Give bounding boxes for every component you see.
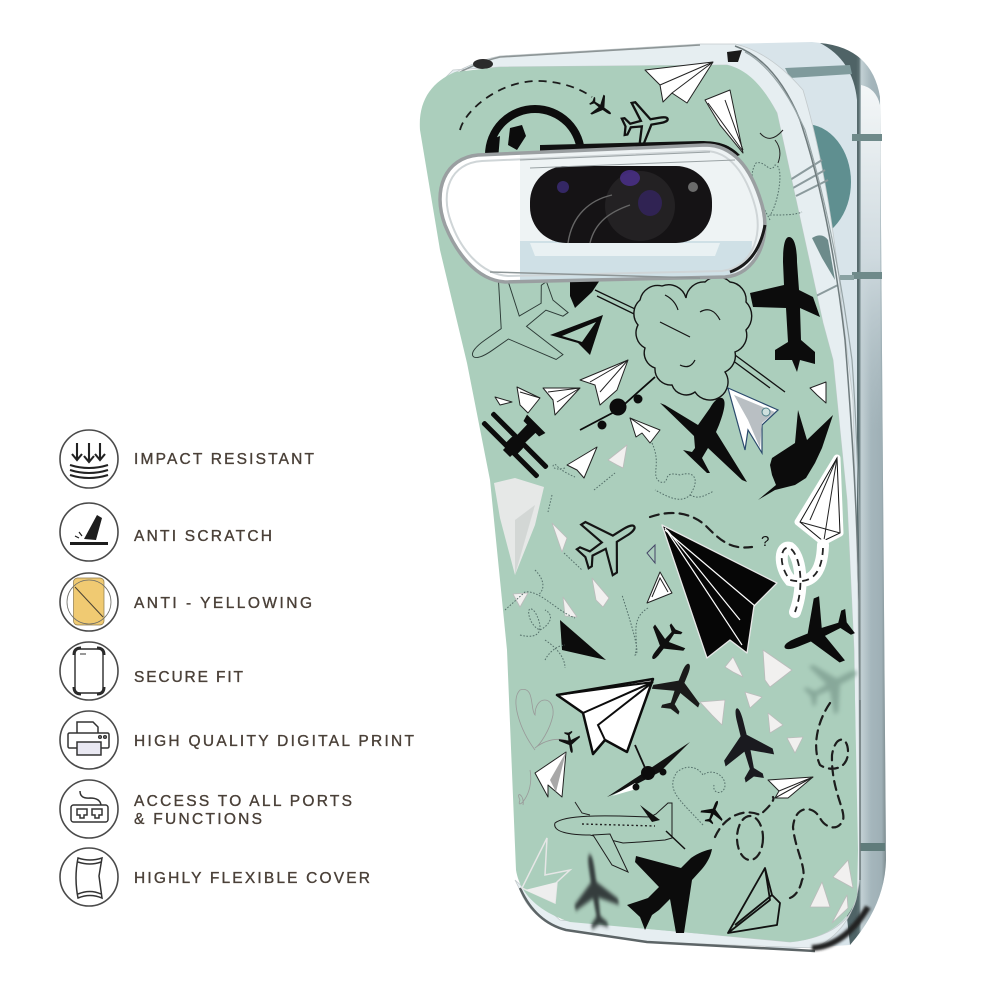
black-and-white dart xyxy=(550,315,603,355)
black plane, rear view xyxy=(758,410,833,500)
feature: impact resistant: IMPACT RESISTANT xyxy=(134,451,315,468)
feature list xyxy=(60,430,415,906)
large black plane xyxy=(750,237,820,372)
heart cloud xyxy=(634,277,752,400)
feature: highly flexible cover xyxy=(60,848,370,906)
white sticker dashed loop xyxy=(782,545,823,612)
paper plane row xyxy=(495,360,628,415)
white sticker paper plane xyxy=(798,458,840,542)
blurred plane, right xyxy=(796,648,869,721)
feature: secure fit: SECURE FIT xyxy=(134,669,244,686)
mint case back xyxy=(420,65,858,942)
dotted heart, lower centre xyxy=(673,767,725,825)
small paper planes, centre-left xyxy=(548,495,672,603)
clear case rim xyxy=(440,44,868,951)
camera cut-out xyxy=(440,141,765,282)
black plane under camera xyxy=(570,280,600,308)
feature: highly flexible cover: HIGHLY FLEXIBLE COVER xyxy=(134,870,370,887)
small white planes xyxy=(553,445,627,490)
faint large paper plane xyxy=(494,478,544,575)
white paper plane with dotted trail xyxy=(630,418,714,499)
feature: impact resistant xyxy=(60,430,315,488)
small black plane, centre xyxy=(638,616,692,671)
feature: secure fit xyxy=(60,642,244,700)
feature: access to all ports and functions: & FUNCTIONS xyxy=(134,811,262,828)
phone body behind the case xyxy=(700,42,886,950)
cluster of small paper planes xyxy=(700,650,803,753)
white outlined paper plane, lower left xyxy=(522,838,570,903)
feature: anti scratch: ANTI SCRATCH xyxy=(134,528,272,545)
small paper plane, right xyxy=(810,382,826,403)
small plane by dashes xyxy=(698,797,728,827)
dashed path with question mark xyxy=(650,513,769,550)
feature: access to all ports and functions: ACCESS TO ALL PORTS xyxy=(134,793,352,810)
feature: high quality digital print: HIGH QUALITY DIGITAL PRINT xyxy=(134,733,415,750)
blurred dark plane xyxy=(568,851,622,931)
very small plane xyxy=(558,730,582,755)
dashed loop, centre bottom xyxy=(715,797,773,860)
dashed path with question mark: ? xyxy=(761,533,769,550)
globe with dashed orbit xyxy=(460,81,592,201)
biplane xyxy=(479,396,564,481)
paper plane, top xyxy=(645,62,713,103)
black triangle xyxy=(560,620,606,660)
black plane, lower centre xyxy=(647,655,712,720)
white paper plane, lower left xyxy=(535,752,566,797)
feature: anti-yellowing xyxy=(60,573,312,631)
black airliner, bottom xyxy=(627,849,712,933)
small paper planes, bottom right xyxy=(810,860,853,923)
outlined paper plane with dashes xyxy=(768,777,813,798)
smoke trail to cloud xyxy=(595,290,785,392)
thin heart trail, lower left xyxy=(516,689,566,750)
paper plane, top right xyxy=(705,90,743,153)
thin outline shape, top right xyxy=(760,130,783,163)
outlined white paper plane xyxy=(557,679,653,754)
black airliner, lower right xyxy=(713,702,779,786)
camera lens bar xyxy=(530,166,712,243)
outline airliner, left xyxy=(444,256,586,397)
outline plane, centre xyxy=(567,501,650,584)
side-view airliner xyxy=(555,802,685,872)
jet front view, lower centre xyxy=(607,742,690,797)
case pattern: aeroplane doodles xyxy=(444,62,869,933)
thick outlined paper plane, bottom xyxy=(728,868,780,933)
small plane, top xyxy=(585,91,617,123)
blue and grey paper plane xyxy=(728,388,778,453)
jet front view xyxy=(580,377,655,430)
dashed trail, right xyxy=(790,703,848,898)
thin loop, lower left xyxy=(519,770,531,805)
feature: access to all ports and functions xyxy=(60,780,352,838)
black plane, right xyxy=(772,589,863,680)
dotted heart, top right xyxy=(752,163,802,220)
black airliner, centre xyxy=(660,398,747,482)
feature: anti-yellowing: ANTI - YELLOWING xyxy=(134,595,312,612)
faded small planes and trails, left xyxy=(505,570,648,655)
outline plane, top xyxy=(619,97,671,149)
feature: high quality digital print xyxy=(60,711,415,769)
dotted heart, lower left xyxy=(520,609,565,668)
feature: anti scratch xyxy=(60,503,272,561)
cloud inner trail xyxy=(660,295,720,367)
big black paper plane xyxy=(662,525,777,658)
